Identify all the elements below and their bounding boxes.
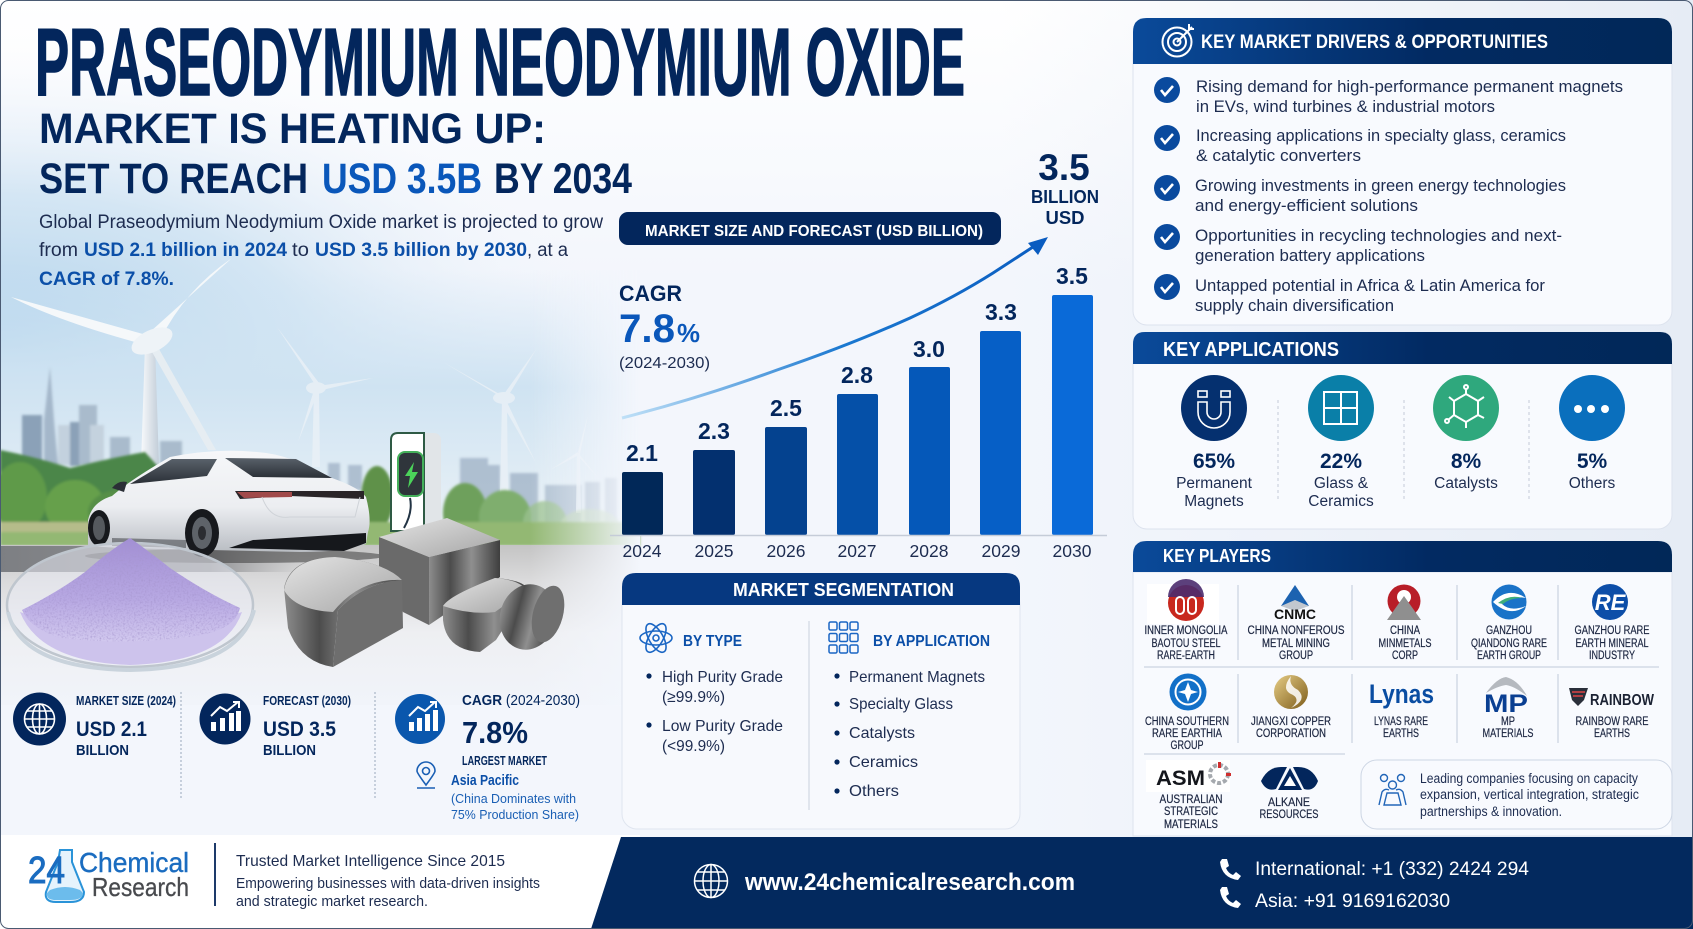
driver text: Opportunities in recycling technologies and next- — [1195, 226, 1562, 245]
road and table surface — [0, 545, 640, 705]
callout: leading companies — [1361, 760, 1672, 829]
check icons — [1154, 77, 1180, 300]
logo: MP Materials: MP — [1484, 690, 1528, 718]
icon: more dots — [1559, 375, 1625, 441]
bar chart: 3.3 — [985, 299, 1017, 325]
driver text: Rising demand for high-performance permanent magnets — [1196, 77, 1623, 96]
forecast callout: BILLION — [1031, 186, 1099, 207]
CAGR callout — [619, 281, 710, 372]
driver text: Increasing applications in specialty glass, ceramics — [1196, 126, 1566, 145]
CAGR callout: % — [677, 318, 700, 348]
list: by application: Catalysts — [849, 725, 915, 742]
bar chart: 2024 — [623, 541, 662, 561]
driver text — [1195, 77, 1623, 315]
forecast callout: 3.5 — [1038, 147, 1090, 188]
icon: glass pane — [1308, 375, 1374, 441]
logo: 24 Chemical Research: 24 — [28, 850, 65, 892]
panel: market segmentation: MARKET SEGMENTATION — [733, 579, 954, 600]
stat: market size 2024: BILLION — [76, 742, 129, 759]
hero photo: clean energy scene — [0, 258, 640, 706]
stat: market size 2024 — [13, 692, 176, 759]
subtitle line 2: USD 3.5B — [322, 155, 482, 203]
driver text: and energy-efficient solutions — [1195, 196, 1418, 215]
bar chart: 2026 — [767, 541, 805, 561]
logo: ASM: ASM — [1156, 767, 1205, 790]
company names: INNER MONGOLIA — [1144, 625, 1228, 637]
application labels: Glass & — [1314, 475, 1369, 492]
neodymium magnets — [284, 518, 570, 667]
panel: market segmentation — [622, 573, 1020, 829]
subtitle line 1: MARKET IS HEATING UP: — [39, 105, 546, 153]
logo: MP Materials — [1484, 677, 1528, 718]
company names: JIANGXI COPPER — [1251, 716, 1331, 728]
stat: forecast 2030: USD 3.5 — [263, 718, 336, 741]
footer: contact band: www.24chemicalresearch.com — [744, 869, 1075, 896]
icon: location pin — [417, 762, 435, 788]
company names: RAINBOW RARE — [1576, 716, 1649, 728]
list: by type: (≥99.9%) — [662, 689, 725, 706]
icon: people group — [1379, 774, 1406, 805]
company names: EARTHS — [1383, 728, 1419, 740]
company names: CHINA NONFEROUS — [1248, 625, 1345, 637]
percentages: 22% — [1320, 450, 1362, 473]
driver text: & catalytic converters — [1196, 146, 1361, 165]
company names: GANZHOU — [1486, 625, 1532, 637]
intro paragraph: to — [292, 240, 309, 261]
icon: growth chart — [395, 694, 445, 744]
panel: key market drivers and opportunities: KEY MARKET DRIVERS & OPPORTUNITIES — [1201, 32, 1548, 53]
panel: key players: KEY PLAYERS — [1163, 545, 1271, 566]
company names: STRATEGIC — [1164, 806, 1218, 818]
footer tagline: Empowering businesses with data-driven insights — [236, 876, 540, 892]
bar chart: 2.1 — [626, 440, 658, 466]
forecast callout — [1031, 147, 1099, 228]
company names: EARTHS — [1594, 728, 1630, 740]
bar chart: 2027 — [838, 541, 876, 561]
stat: CAGR and largest market: (China Dominates with — [451, 791, 576, 806]
logo: Ganzhou RE — [1592, 584, 1628, 620]
driver text: supply chain diversification — [1195, 296, 1394, 315]
bar chart: 2028 — [910, 541, 948, 561]
list: by application — [834, 669, 985, 800]
footer tagline: Trusted Market Intelligence Since 2015 — [236, 853, 505, 870]
footer: company branding — [0, 835, 640, 929]
chart title pill — [619, 212, 1001, 245]
company names: MATERIALS — [1482, 728, 1534, 740]
list: by application: Specialty Glass — [849, 696, 953, 713]
bar chart: 3.5 — [1056, 263, 1088, 289]
icon: target — [1162, 24, 1194, 56]
list: by type: Low Purity Grade — [662, 718, 783, 735]
chart title pill: MARKET SIZE AND FORECAST (USD BILLION) — [645, 223, 983, 240]
bar chart: 2.3 — [698, 418, 730, 444]
logo: Ganzhou Qiandong — [1492, 584, 1526, 620]
stat: forecast 2030: FORECAST (2030) — [263, 693, 351, 708]
intro paragraph: USD 3.5 billion by 2030 — [315, 240, 527, 261]
subtitle line 2 — [39, 155, 632, 203]
application labels — [1176, 475, 1616, 510]
panel: market segmentation: BY TYPE — [683, 633, 742, 650]
bar chart — [610, 263, 1107, 561]
bar chart: 3.0 — [913, 336, 945, 362]
company names: CHINA SOUTHERN — [1145, 716, 1229, 728]
driver text: Growing investments in green energy technologies — [1195, 176, 1566, 195]
footer: contact band: Asia: +91 9169162030 — [1255, 890, 1450, 912]
bar chart: 2.8 — [841, 362, 873, 388]
logos — [1146, 579, 1654, 792]
application labels: Others — [1569, 475, 1616, 492]
logo: CNMC — [1274, 585, 1316, 622]
logo: Lynas: Lynas — [1369, 679, 1434, 709]
stat: CAGR and largest market: Asia Pacific — [451, 772, 519, 789]
logo: 24 Chemical Research: Chemical — [79, 847, 189, 878]
company names — [1144, 625, 1650, 831]
logo: Inner Mongolia Baotou — [1147, 579, 1219, 624]
intro paragraph — [39, 212, 603, 290]
stat: market size 2024: MARKET SIZE (2024) — [76, 693, 176, 708]
icon: atom — [640, 621, 672, 655]
application labels: Catalysts — [1434, 475, 1498, 492]
percentages: 5% — [1577, 450, 1607, 473]
growth arrow — [622, 237, 1048, 418]
company names: INDUSTRY — [1589, 650, 1635, 662]
intro paragraph: , at a — [527, 240, 568, 261]
company names: CORP — [1392, 650, 1418, 662]
driver text: Untapped potential in Africa & Latin America for — [1195, 276, 1545, 295]
callout: leading companies: expansion, vertical integration, strategic — [1420, 787, 1639, 802]
stat: forecast 2030 — [200, 693, 351, 759]
CAGR callout: 7.8 — [619, 307, 675, 351]
icon: globe — [13, 692, 66, 746]
company names: MATERIALS — [1164, 819, 1218, 831]
driver text: generation battery applications — [1195, 246, 1425, 265]
company names: CORPORATION — [1256, 728, 1326, 740]
company names: LYNAS RARE — [1374, 716, 1428, 728]
CAGR callout: (2024-2030) — [619, 355, 710, 372]
logo: China Minmetals — [1387, 584, 1421, 620]
logo: Rainbow: RAINBOW — [1590, 692, 1654, 709]
company names: MP — [1501, 716, 1515, 728]
logo: ASM — [1146, 760, 1231, 792]
stat: CAGR and largest market: LARGEST MARKET — [462, 754, 547, 768]
logo: 24 Chemical Research — [28, 847, 189, 902]
stat: forecast 2030: BILLION — [263, 742, 316, 759]
trees and grass — [0, 450, 640, 546]
stat: CAGR and largest market: 7.8% — [462, 715, 528, 750]
company names: GROUP — [1279, 650, 1313, 662]
subtitle line 2: SET TO REACH — [39, 155, 308, 203]
footer: contact band — [591, 837, 1693, 929]
panel: market segmentation: BY APPLICATION — [873, 633, 990, 650]
company names: GROUP — [1170, 740, 1204, 752]
bar chart: 2030 — [1053, 541, 1092, 561]
forecast callout: USD — [1045, 207, 1085, 228]
bar chart: 2025 — [695, 541, 733, 561]
intro paragraph: USD 2.1 billion in 2024 — [84, 240, 287, 261]
CAGR callout: CAGR — [619, 281, 682, 306]
list: by type — [646, 669, 783, 755]
icon: globe — [694, 864, 728, 898]
intro paragraph: from — [39, 240, 78, 261]
company names: QIANDONG RARE — [1471, 638, 1547, 650]
percentages: 8% — [1451, 450, 1481, 473]
intro paragraph: CAGR of 7.8%. — [39, 269, 174, 290]
company names: EARTH GROUP — [1477, 650, 1541, 662]
stat: CAGR and largest market: CAGR (2024-2030) — [462, 692, 580, 709]
company names: CHINA — [1390, 625, 1420, 637]
bar chart: 2029 — [982, 541, 1020, 561]
company names: METAL MINING — [1262, 638, 1330, 650]
application labels: Permanent — [1176, 475, 1253, 492]
logo: China Southern — [1170, 674, 1206, 710]
company names: RARE-EARTH — [1157, 650, 1215, 662]
application labels: Ceramics — [1308, 493, 1374, 510]
logo: Rainbow — [1569, 688, 1654, 709]
logo: Ganzhou RE: RE — [1595, 590, 1627, 615]
footer: contact band: International: +1 (332) 2424 294 — [1255, 858, 1529, 880]
EV charger — [391, 433, 441, 531]
company names: ALKANE — [1268, 797, 1310, 809]
list: by application: Permanent Magnets — [849, 669, 985, 686]
company names: EARTH MINERAL — [1576, 638, 1649, 650]
icon: phone — [1220, 887, 1241, 908]
panel: key market drivers and opportunities — [1133, 18, 1672, 325]
intro paragraph: Global Praseodymium Neodymium Oxide market is projected to grow — [39, 212, 603, 233]
percentages: 65% — [1193, 450, 1235, 473]
footer tagline: and strategic market research. — [236, 894, 428, 910]
panel: key applications — [1133, 332, 1672, 529]
icon: phone — [1220, 859, 1241, 880]
wind turbines — [11, 258, 600, 513]
callout: leading companies: Leading companies focusing on capacity — [1420, 771, 1638, 786]
logo: 24 Chemical Research: Research — [92, 872, 189, 902]
stat: market size 2024: USD 2.1 — [76, 718, 147, 741]
company names: BAOTOU STEEL — [1152, 638, 1221, 650]
icon: rising chart — [200, 694, 250, 744]
company names: RESOURCES — [1260, 809, 1319, 821]
application labels: Magnets — [1184, 493, 1244, 510]
company names: AUSTRALIAN — [1160, 794, 1222, 806]
stat: CAGR and largest market: 75% Production Share) — [451, 807, 579, 822]
EV car — [85, 451, 385, 563]
footer tagline — [236, 853, 540, 910]
percentages — [1193, 450, 1607, 473]
driver text: in EVs, wind turbines & industrial motors — [1196, 97, 1495, 116]
city skylines — [22, 367, 617, 525]
panel: key applications: KEY APPLICATIONS — [1163, 339, 1339, 361]
logo: Alkane — [1261, 767, 1318, 790]
logo: Jiangxi Copper — [1274, 675, 1308, 709]
stat: CAGR and largest market — [395, 692, 580, 822]
icon: molecule — [1433, 375, 1499, 441]
icon: grid — [829, 622, 858, 653]
company names: RARE EARTHIA — [1152, 728, 1222, 740]
list: by type: (<99.9%) — [662, 738, 725, 755]
icon: magnet — [1181, 375, 1247, 441]
company names: GANZHOU RARE — [1574, 625, 1650, 637]
panel: key players — [1133, 541, 1672, 836]
company names: MINMETALS — [1378, 638, 1432, 650]
petri dish with oxide powder — [7, 538, 254, 670]
logo: CNMC: CNMC — [1274, 607, 1316, 622]
list: by type: High Purity Grade — [662, 669, 783, 686]
list: by application: Others — [849, 783, 899, 800]
bar chart: 2.5 — [770, 395, 802, 421]
list: by application: Ceramics — [849, 754, 918, 771]
subtitle line 2: BY 2034 — [494, 155, 632, 203]
callout: leading companies: partnerships & innovation. — [1420, 804, 1562, 819]
